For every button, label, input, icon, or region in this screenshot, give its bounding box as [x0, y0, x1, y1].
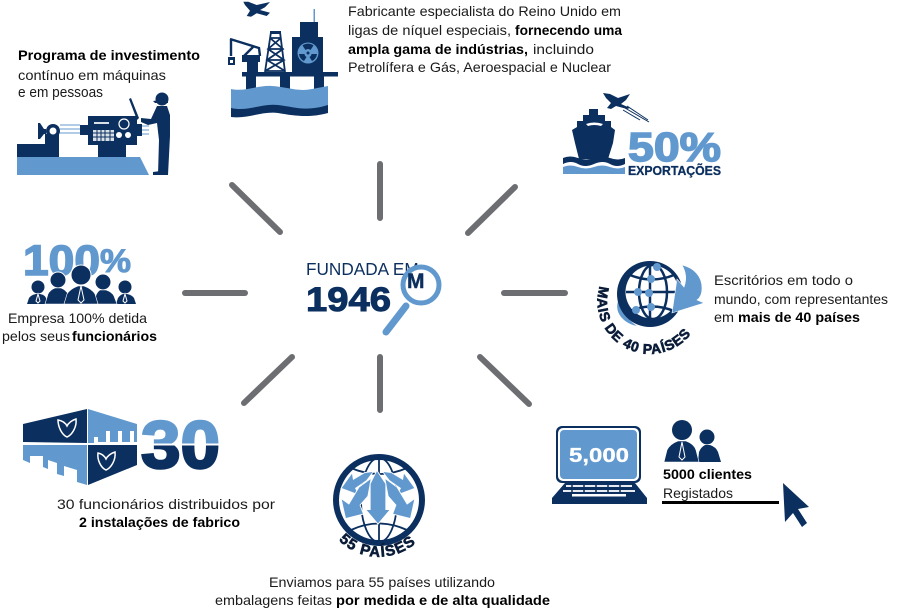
curved label: mais de 40 países: MAIS DE 40 PAÍSES	[596, 286, 690, 354]
panel: founded 1946	[306, 259, 439, 332]
icon: globe with arrow	[617, 261, 704, 327]
stat: 100 percent: %	[100, 243, 131, 279]
text: shipping: embalagens feitas	[215, 592, 332, 608]
panel: 100 percent employee-owned	[2, 237, 157, 344]
text: staff and facilities: 30 funcionários distribuidos por	[57, 496, 275, 512]
text: investment programme	[18, 47, 200, 101]
icon: two clients	[664, 420, 721, 462]
icon: mouse cursor	[783, 483, 809, 527]
text: investment programme: Programa de investimento	[18, 47, 200, 63]
panel: 5000 clients	[552, 420, 809, 527]
stat: 100 percent: 100	[23, 237, 100, 285]
text: specialist manufacturer: ligas de níquel especiais,	[348, 22, 511, 38]
text: specialist manufacturer: incluindo	[533, 41, 594, 57]
stat: 100 percent	[23, 237, 131, 285]
text: shipping: por medida e de alta qualidade	[336, 592, 550, 608]
stat: 50 percent: 50%	[628, 124, 721, 170]
text: 5000 clients registered	[663, 466, 752, 501]
icon: laptop: 5,000	[569, 445, 629, 467]
text: employee-owned: pelos seus	[2, 328, 70, 344]
text: specialist manufacturer: Fabricante especialista do Reino Unido em	[348, 3, 621, 19]
text: offices worldwide: mundo, com representantes	[714, 291, 888, 307]
heading: fundada em: FUNDADA EM	[306, 259, 419, 279]
text: specialist manufacturer: fornecendo uma	[515, 22, 622, 38]
text: offices worldwide	[714, 272, 888, 325]
panel: 55 countries	[215, 454, 550, 608]
icon: laptop	[552, 426, 647, 504]
text: specialist manufacturer	[348, 3, 622, 75]
text: specialist manufacturer: ampla gama de indústrias,	[348, 41, 528, 57]
panel: exports	[563, 93, 721, 178]
text: employee-owned: Empresa 100% detida	[8, 310, 147, 326]
icon: globe with arrows	[336, 457, 422, 543]
icon: magnifying glass: M	[407, 270, 424, 293]
text: employee-owned: funcionários	[72, 328, 157, 344]
text: staff and facilities	[57, 496, 275, 530]
icon: ship	[563, 109, 625, 174]
icon: machine and worker	[17, 92, 170, 175]
text: offices worldwide: Escritórios em todo o	[714, 272, 853, 288]
panel: 40 countries	[596, 261, 888, 354]
text: investment programme: e em pessoas	[18, 85, 103, 101]
icon: plane over rig	[243, 2, 270, 17]
text: offices worldwide: mais de 40 países	[738, 309, 860, 325]
panel: investment programme	[17, 47, 200, 175]
panel: industries	[228, 2, 622, 117]
text: employee-owned	[2, 310, 157, 344]
text: shipping: Enviamos para 55 países utilizando	[269, 574, 495, 590]
stat: 30: 30	[141, 408, 220, 483]
icon: employees group	[27, 265, 136, 304]
icon: factory blocks	[23, 409, 137, 485]
text: staff and facilities: 2 instalações de fabrico	[79, 514, 240, 530]
icon: plane with trails	[603, 93, 649, 122]
text: specialist manufacturer: Petrolífera e Gás, Aeroespacial e Nuclear	[348, 59, 611, 75]
text: 5000 clients registered: Registados	[663, 485, 733, 501]
curved label: 55 países: 55 PAÍSES	[340, 532, 414, 558]
year 1946: 1946	[306, 281, 391, 319]
text: offices worldwide: em	[714, 309, 734, 325]
icon: oil rig and nuclear plant	[228, 9, 338, 117]
label: exports: EXPORTAÇÕES	[628, 163, 721, 178]
panel: 30 employees, 2 facilities	[23, 408, 275, 530]
text: 5000 clients registered: 5000 clientes	[663, 466, 752, 482]
text: investment programme: contínuo em máquinas	[18, 67, 166, 83]
text: shipping	[215, 574, 550, 608]
